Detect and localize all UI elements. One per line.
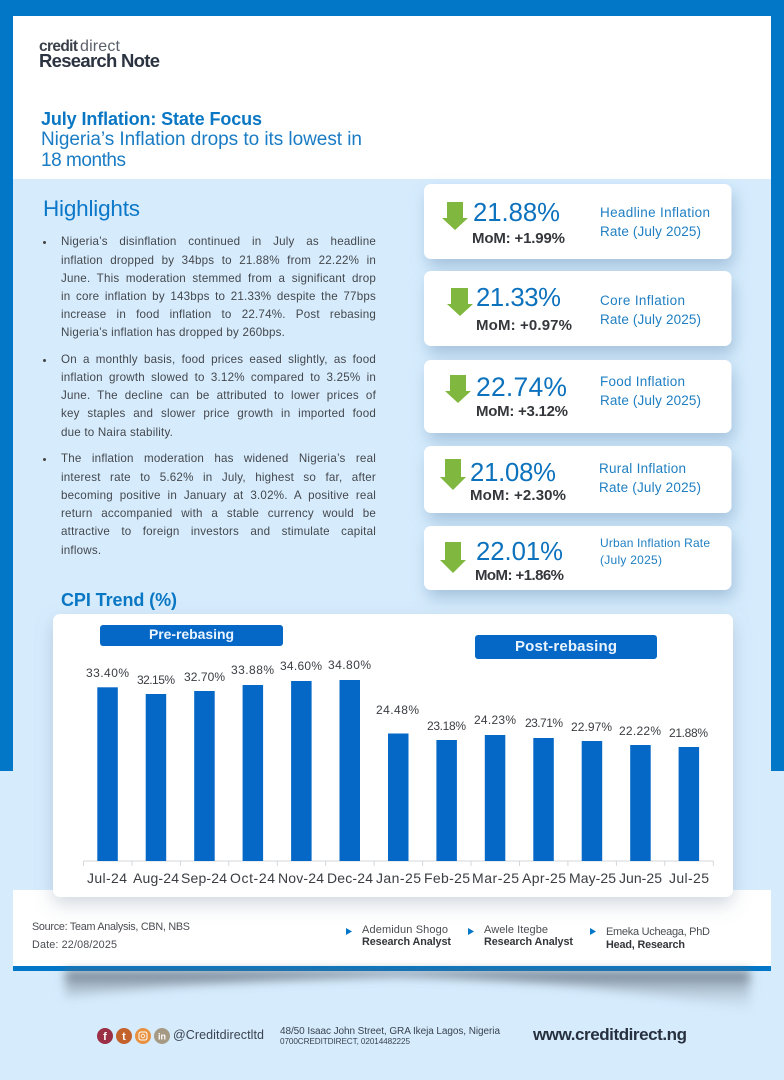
- analyst: Awele Itegbe: [468, 924, 573, 948]
- bar values: [86, 658, 708, 740]
- card: urban inflation: MoM: +1.86%: [475, 567, 564, 584]
- card: headline inflation: Headline Inflation: [600, 205, 710, 220]
- icon: linkedin: [154, 1028, 170, 1044]
- analyst: Emeka Ucheaga: [590, 926, 710, 951]
- bullet three: attractive to foreign investors and stimulate capital: [61, 525, 376, 538]
- card: urban inflation: [424, 526, 732, 590]
- icon: instagram: [135, 1028, 151, 1044]
- source and date: Source: Team Analysis, CBN, NBS: [32, 921, 190, 933]
- axis labels: Jun-25: [619, 870, 662, 886]
- bar values: 34.80%: [328, 658, 371, 672]
- axis labels: Mar-25: [472, 870, 519, 886]
- card: core inflation: [424, 271, 732, 346]
- bar values: 33.40%: [86, 666, 129, 680]
- card: food inflation: MoM: +3.12%: [476, 403, 568, 420]
- bar values: 23.71%: [525, 716, 563, 730]
- bar values: 33.88%: [231, 663, 274, 677]
- panel: CPI bar chart: [53, 614, 733, 897]
- icon: down arrow urban: [440, 542, 466, 573]
- axis labels: Sep-24: [181, 870, 227, 886]
- bullet two: June. The decline can be attributed to lower prices of: [61, 389, 376, 402]
- analyst: Awele Itegbe: Awele Itegbe: [484, 924, 548, 936]
- analyst: Awele Itegbe: Research Analyst: [484, 936, 573, 948]
- icon: linkedin: in: [158, 1032, 166, 1042]
- analyst: Emeka Ucheaga: Head, Research: [606, 939, 685, 951]
- address: [280, 1026, 500, 1046]
- axis labels: Jul-24: [87, 870, 127, 886]
- bullet one: increase in food inflation to 22.74%. Post rebasing: [61, 308, 376, 320]
- card: rural inflation: Rural Inflation: [599, 461, 686, 476]
- card: headline inflation: Rate (July 2025): [600, 224, 701, 239]
- bar values: 24.48%: [376, 703, 419, 717]
- heading: Highlights: Highlights: [43, 196, 140, 221]
- card: core inflation: MoM: +0.97%: [476, 317, 572, 334]
- social icons and handle: [97, 1028, 264, 1044]
- label: post-rebasing: Post-rebasing: [515, 638, 617, 655]
- card: rural inflation: 21.08%: [470, 459, 556, 487]
- axis labels: Nov-24: [278, 870, 324, 886]
- icon: facebook: f: [103, 1031, 107, 1043]
- text block: highlights bullets: [43, 235, 376, 557]
- axis labels: Feb-25: [424, 870, 470, 886]
- bullet three: The inflation moderation has widened Nigeria’s real: [61, 452, 376, 465]
- card: core inflation: Core Inflation: [600, 293, 685, 308]
- bullet one: [43, 235, 376, 339]
- source and date: Date: 22/08/2025: [32, 939, 117, 951]
- bar values: 32.70%: [184, 670, 225, 684]
- bar values: 24.23%: [474, 713, 516, 727]
- bullet three: becoming positive in January at 3.02%. A positive real: [61, 489, 376, 502]
- icon: facebook: [97, 1028, 113, 1044]
- axis labels: Apr-25: [522, 870, 566, 886]
- heading: CPI Trend: CPI Trend (%): [61, 590, 177, 610]
- card: core inflation: 21.33%: [476, 284, 561, 312]
- label: post-rebasing: [475, 635, 657, 659]
- bars: [97, 680, 699, 861]
- bar values: 21.88%: [669, 726, 708, 740]
- card: food inflation: 22.74%: [476, 372, 567, 402]
- bullet three: return accompanied with a stable currency would be: [61, 507, 376, 520]
- bar values: 22.97%: [571, 720, 612, 734]
- address: 48/50 Isaac John Street, GRA Ikeja Lagos, Nigeria: [280, 1026, 500, 1037]
- card: rural inflation: Rate (July 2025): [599, 480, 701, 495]
- blue page frame: [0, 0, 784, 771]
- bullet two: inflation growth slowed to 3.12% compared to 3.25% in: [61, 371, 376, 384]
- analyst: Ademidun Shogo: Ademidun Shogo: [362, 924, 448, 936]
- icon: down arrow core: [447, 288, 473, 316]
- title: [41, 109, 362, 171]
- card: urban inflation: (July 2025): [600, 553, 662, 567]
- icon: down arrow food: [445, 375, 471, 403]
- analyst: Emeka Ucheaga: Emeka Ucheaga, PhD: [606, 926, 710, 938]
- title: 18 months: [41, 150, 126, 171]
- title: July Inflation: State Focus: [41, 109, 262, 129]
- bullet one: June. This moderation stemmed from a significant drop: [61, 272, 376, 284]
- axis: [84, 861, 714, 866]
- footer curved shadow: [65, 971, 750, 1012]
- source and date: [32, 921, 190, 951]
- bullet three: interest rate to 5.62% in July, highest so far, after: [61, 471, 376, 484]
- icon: down arrow rural: [440, 459, 466, 490]
- card: headline inflation: MoM: +1.99%: [472, 230, 565, 247]
- card: urban inflation: 22.01%: [476, 538, 563, 566]
- axis labels: Dec-24: [327, 870, 373, 886]
- bullet two: due to Naira stability.: [61, 426, 173, 439]
- axis labels: Jan-25: [376, 870, 421, 886]
- logo: credit direct Research Note: Research Note: [39, 50, 160, 71]
- logo: credit direct Research Note: credit: [39, 38, 78, 55]
- bar values: 22.22%: [619, 724, 661, 738]
- bullet one: Nigeria’s disinflation continued in July as headline: [61, 235, 376, 248]
- bullet two: On a monthly basis, food prices eased slightly, as food: [61, 353, 376, 366]
- label: pre-rebasing: [100, 625, 283, 646]
- axis labels: Jul-25: [669, 870, 709, 886]
- bullet one: inflation dropped by 34bps to 21.88% from 22.22% in: [61, 254, 376, 266]
- website: www.creditdirect.ng: [532, 1025, 687, 1044]
- axis labels: Aug-24: [133, 870, 179, 886]
- bar values: 23.18%: [427, 719, 466, 733]
- analyst: Ademidun Shogo: Research Analyst: [362, 936, 451, 948]
- card: headline inflation: [424, 184, 732, 259]
- card: urban inflation: Urban Inflation Rate: [600, 536, 710, 550]
- social icons and handle: @Creditdirectltd: [173, 1028, 264, 1042]
- axis labels: May-25: [569, 870, 616, 886]
- bullet one: in core inflation by 143bps to 21.33% despite the 77bps: [61, 290, 376, 302]
- white header panel: [13, 16, 771, 179]
- title: Nigeria’s Inflation drops to its lowest in: [41, 129, 362, 150]
- card: food inflation: Food Inflation: [600, 374, 685, 389]
- analyst: Ademidun Shogo: [346, 924, 451, 948]
- bar values: 32.15%: [137, 673, 175, 687]
- card: food inflation: [424, 360, 732, 433]
- bullet two: key staples and slower price growth in imported food: [61, 407, 376, 420]
- axis labels: Oct-24: [230, 870, 275, 886]
- card: food inflation: Rate (July 2025): [600, 393, 701, 408]
- icon: twitter: [116, 1028, 132, 1044]
- bar values: 34.60%: [280, 659, 322, 673]
- bullet three: [43, 452, 376, 557]
- logo: credit direct Research Note: [39, 38, 160, 71]
- bullet two: [43, 353, 376, 439]
- icon: down arrow headline: [442, 202, 468, 230]
- icon: twitter: t: [122, 1031, 126, 1043]
- card: rural inflation: MoM: +2.30%: [470, 487, 566, 504]
- axis labels: [87, 870, 709, 886]
- address: 0700CREDITDIRECT, 02014482225: [280, 1037, 410, 1046]
- card: headline inflation: 21.88%: [473, 199, 560, 227]
- card: core inflation: Rate (July 2025): [600, 312, 701, 327]
- bullet three: inflows.: [61, 544, 101, 557]
- logo: credit direct Research Note: direct: [80, 38, 121, 55]
- bullet one: Nigeria’s inflation has dropped by 260bps.: [61, 326, 285, 339]
- footer white band: [13, 890, 771, 971]
- card: rural inflation: [424, 446, 732, 513]
- label: pre-rebasing: Pre-rebasing: [149, 626, 234, 642]
